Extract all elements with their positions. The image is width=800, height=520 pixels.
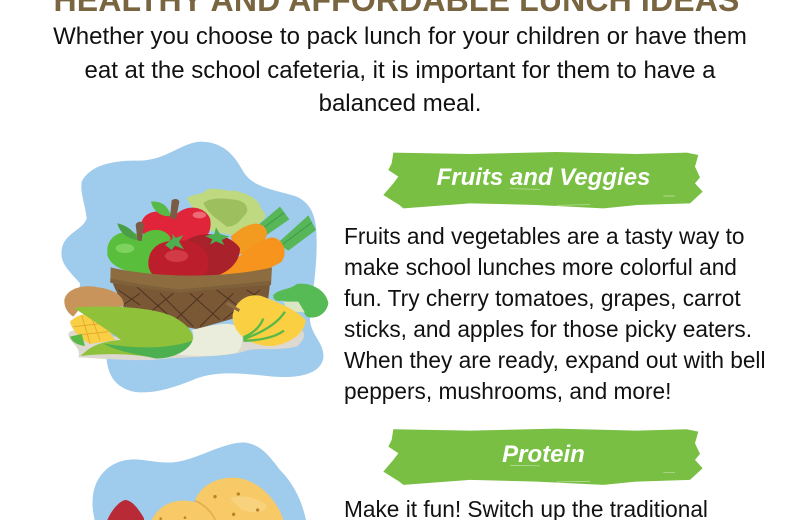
green apple [107,222,171,274]
body text: fruits and veggies: fun. Try cherry tomatoes, grapes, carrot [344,285,741,311]
body text: fruits and veggies: sticks, and apples for those picky eaters. [344,316,752,342]
banner heading: Fruits and Veggies: Fruits and Veggies [437,164,650,191]
white radish [177,324,242,356]
cracker front [152,501,215,520]
tomatoes [148,227,240,277]
body text: fruits and veggies [344,223,766,404]
intro text: eat at the school cafeteria, it is important for them to have a [84,56,716,84]
cracker back [195,478,283,520]
intro text: balanced meal. [319,90,481,117]
basket [110,267,272,329]
carrots [216,207,316,276]
body text: fruits and veggies: When they are ready, expand out with bell [344,347,766,373]
shadow plate [68,329,304,360]
strawberry [107,500,144,520]
intro text [53,23,747,117]
potato [64,286,124,317]
illustration: protein crackers [92,442,306,520]
banner: fruits and veggies [383,152,703,208]
yellow squash [225,295,306,346]
intro text: Whether you choose to pack lunch for your children or have them [53,23,747,50]
banner: protein [383,429,703,485]
lettuce [187,189,265,236]
red apple [141,199,211,247]
banner heading: Protein: Protein [502,441,585,468]
blue blob [61,142,323,392]
corn cob [70,307,193,358]
body text: fruits and veggies: make school lunches more colorful and [344,254,737,280]
body text: fruits and veggies: peppers, mushrooms, and more! [344,378,671,404]
broccoli [273,284,328,318]
body text: fruits and veggies: Fruits and vegetables are a tasty way to [344,223,744,249]
blue blob: protein [92,442,306,520]
